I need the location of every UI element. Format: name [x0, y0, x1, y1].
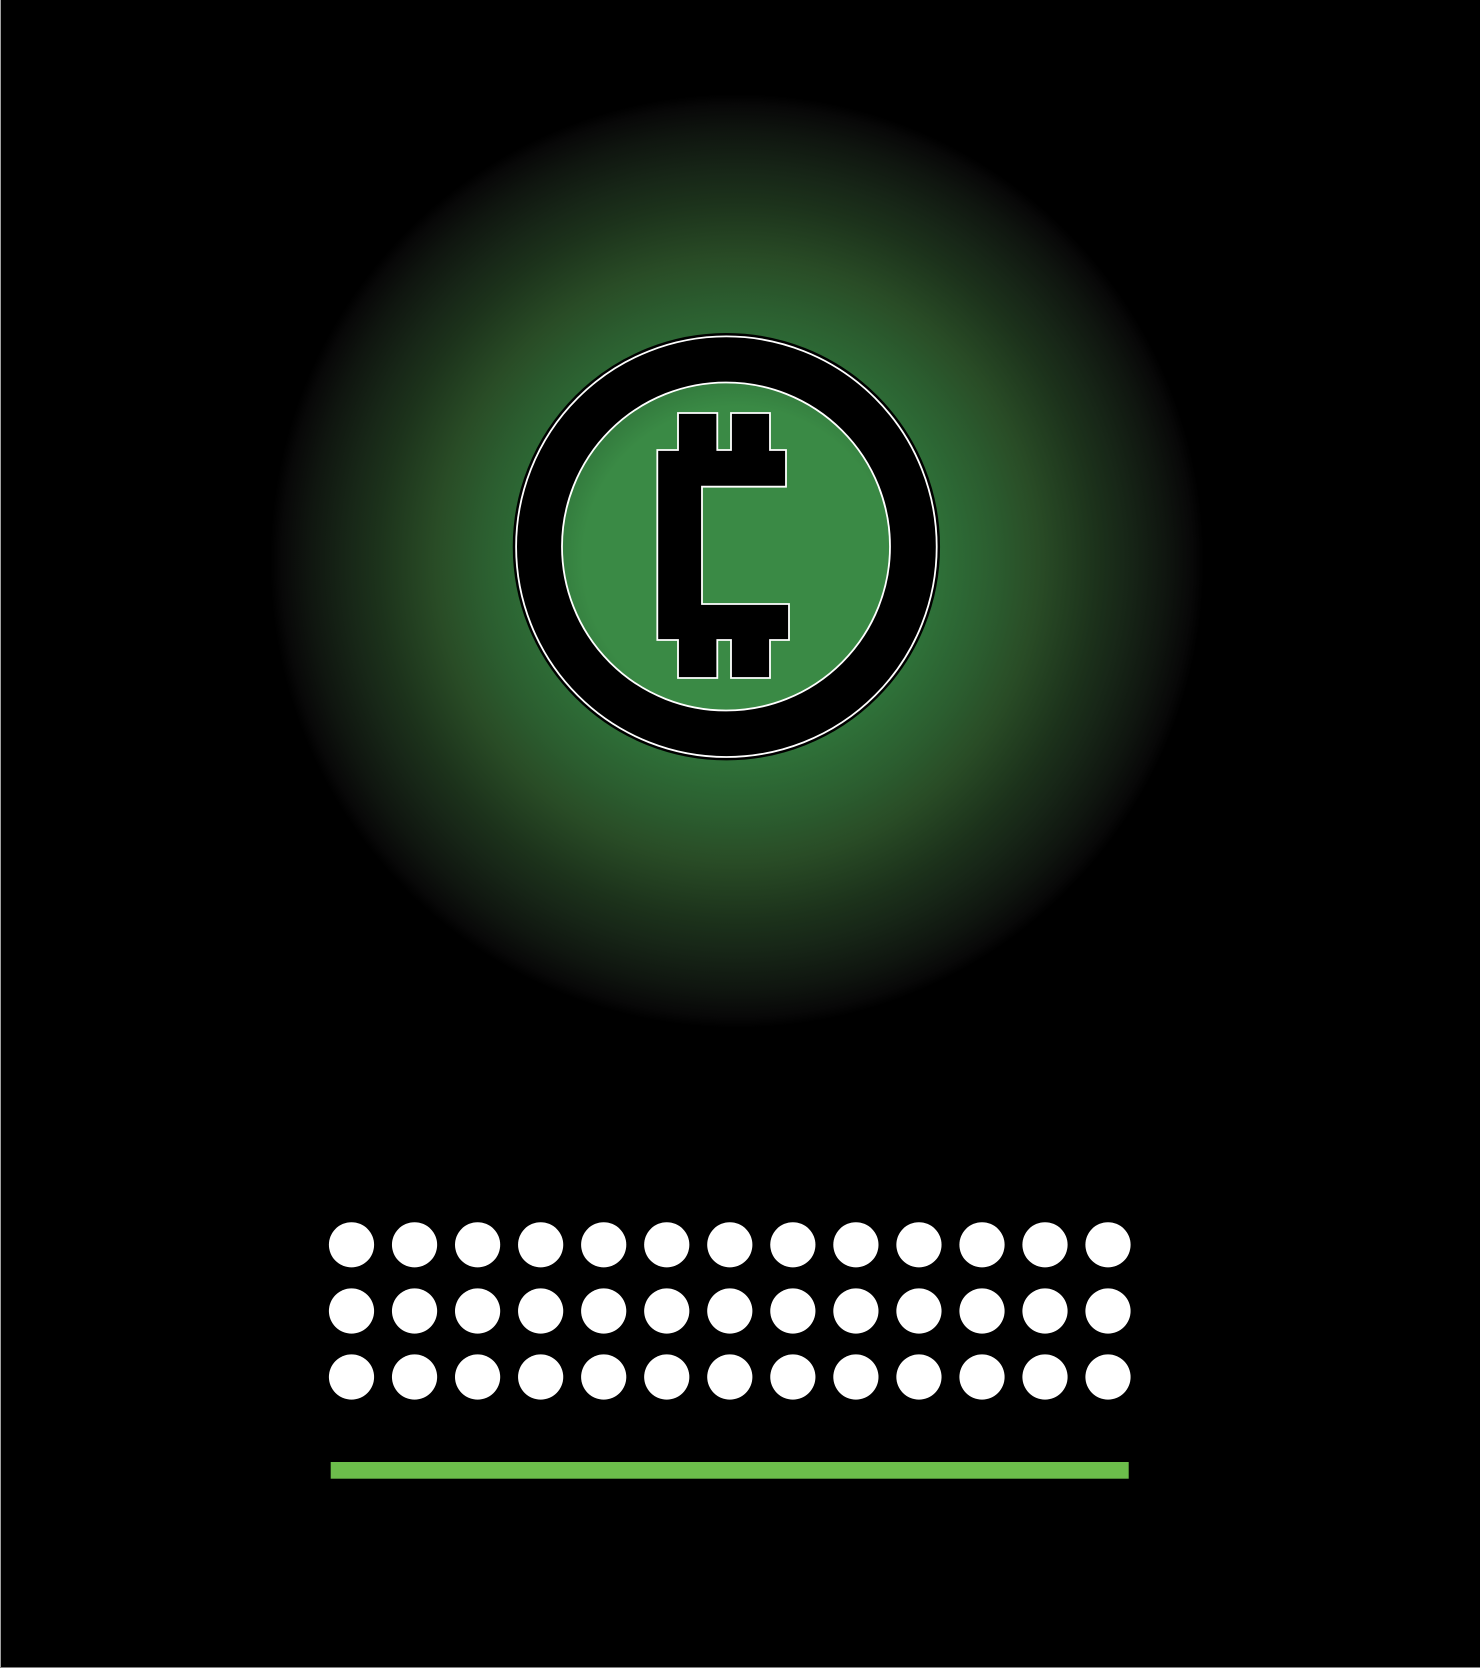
- icon: C currency symbol: [657, 413, 789, 678]
- dot row 2: [329, 1288, 1131, 1334]
- coin outer ring: [514, 334, 939, 759]
- bottom edge line: [0, 1667, 1480, 1668]
- dot row 1: [329, 1222, 1131, 1267]
- icon: crypto coin: [514, 334, 939, 759]
- coin inner green disc: [562, 382, 890, 710]
- coin white outline: [516, 336, 937, 757]
- left edge line: [0, 0, 1, 1668]
- dot grid: [329, 1222, 1131, 1400]
- green bar: [331, 1462, 1129, 1479]
- green radial glow: [270, 94, 1204, 1028]
- dot row 3: [329, 1354, 1131, 1400]
